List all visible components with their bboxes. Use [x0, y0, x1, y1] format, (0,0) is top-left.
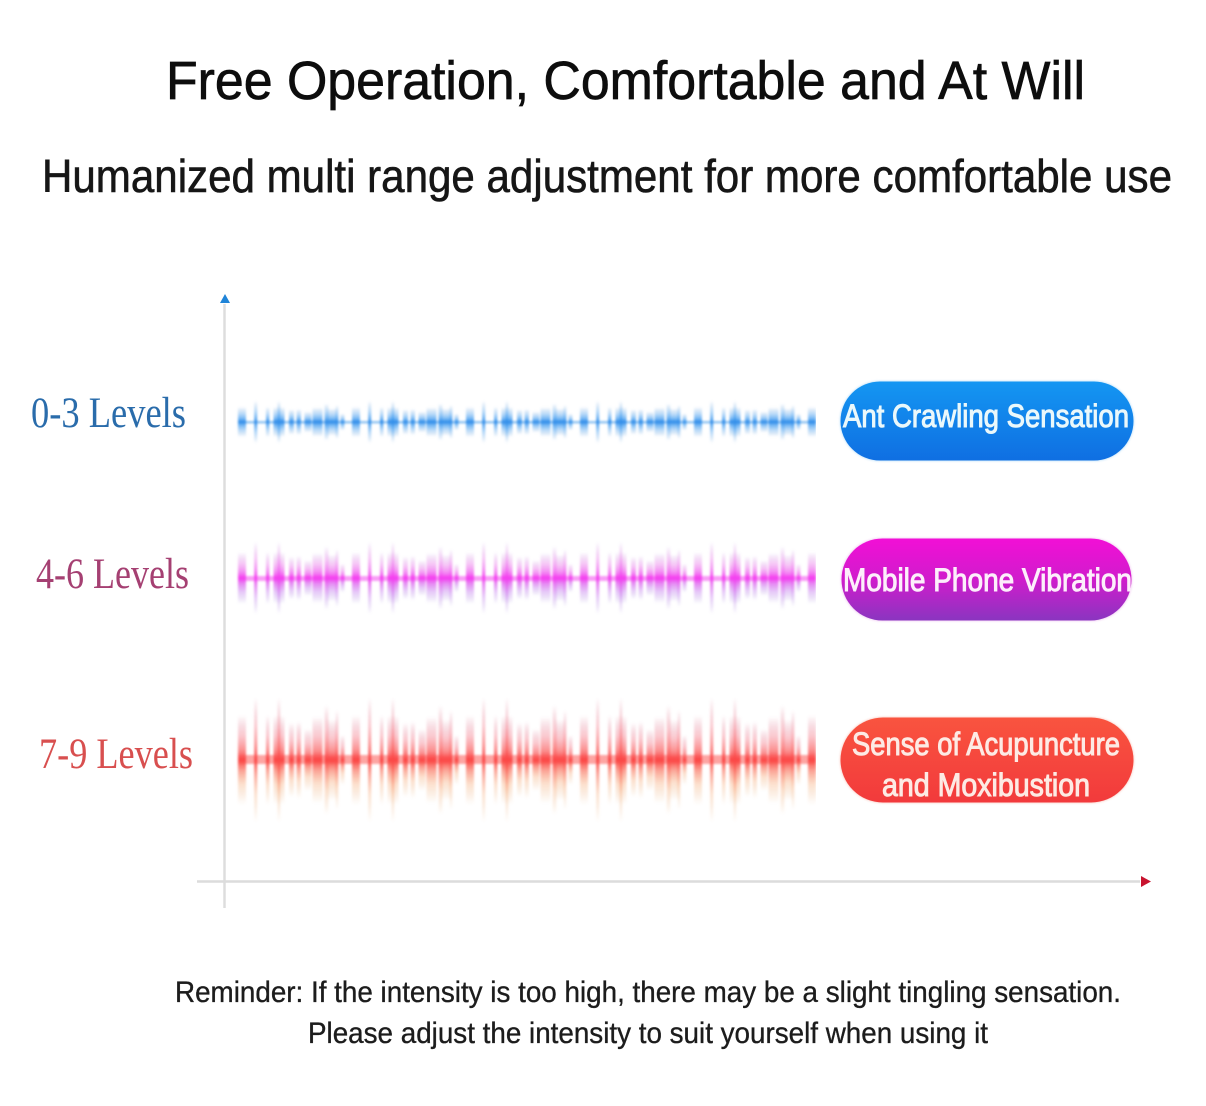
reminder text: Reminder: If the intensity is too high, there may be a slight tingling sensation.: [175, 976, 1121, 1009]
pill: mobile phone vibration: Mobile Phone Vibration: [843, 562, 1132, 598]
waveform: red: [236, 702, 816, 816]
label: 4-6 levels: 4-6 Levels: [36, 551, 189, 598]
pill: sense of acupuncture and moxibustion: and Moxibustion: [882, 767, 1090, 803]
pill: ant crawling sensation: Ant Crawling Sensation: [843, 398, 1129, 434]
chart: intensity levels: [31, 294, 1151, 908]
x axis with arrow: [197, 876, 1151, 887]
waveform: blue: [236, 402, 816, 442]
pill: sense of acupuncture and moxibustion: Sense of Acupuncture: [852, 726, 1120, 762]
label: 0-3 levels: 0-3 Levels: [31, 390, 186, 437]
pill: mobile phone vibration: [841, 538, 1132, 621]
waveform: magenta: [236, 544, 816, 611]
title: Free Operation, Comfortable and At Will: [166, 51, 1085, 111]
label: 7-9 levels: 7-9 Levels: [39, 731, 193, 778]
pill: sense of acupuncture and moxibustion: [840, 717, 1134, 803]
y axis with arrow: [220, 294, 230, 908]
reminder text: Please adjust the intensity to suit yourself when using it: [308, 1017, 989, 1050]
reminder text: [175, 976, 1121, 1050]
pill: ant crawling sensation: [840, 381, 1134, 461]
